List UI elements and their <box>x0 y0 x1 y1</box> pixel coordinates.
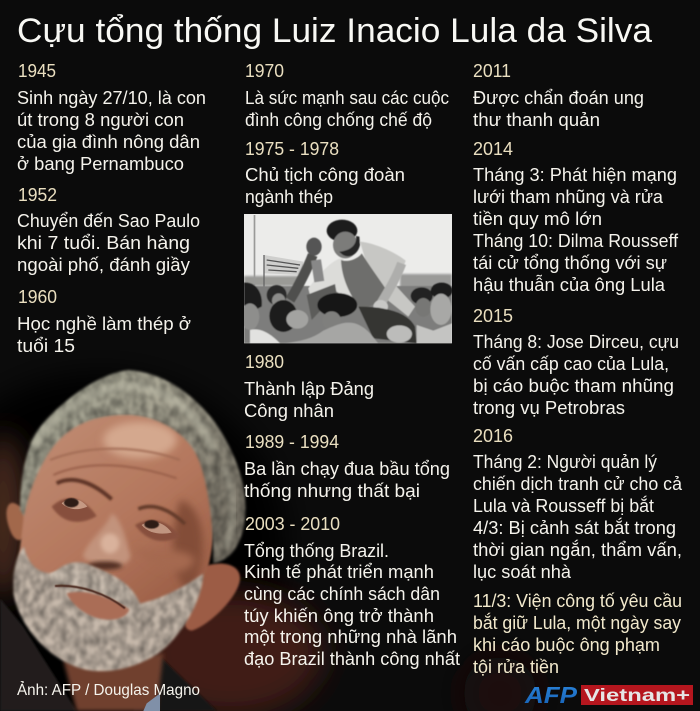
entry: 1945 <box>17 60 206 174</box>
logo: AFP Vietnam+: Vietnam+ <box>584 685 690 705</box>
entry: 2003 - 2010: Tổng thống Brazil. <box>244 540 389 561</box>
entry: 1952: ngoài phố, đánh giầy <box>17 254 191 275</box>
title: Cựu tổng thống Luiz Inacio Lula da Silva <box>17 12 653 50</box>
entry: 2014: Tháng 3: Phát hiện mạng <box>473 164 677 185</box>
entry: 2011 <box>473 60 644 130</box>
entry: 1945: út trong 8 người con <box>17 109 184 130</box>
entry: 1980: 1980 <box>245 351 284 372</box>
entry: 2016: tội rửa tiền <box>473 656 559 677</box>
entry: 2003 - 2010: túy khiến ông trở thành <box>244 605 434 626</box>
entry: 2015 <box>473 305 679 418</box>
entry: 2016: lục soát nhà <box>473 561 572 582</box>
entry: 2003 - 2010 <box>244 513 460 669</box>
entry: 1952: khi 7 tuổi. Bán hàng <box>17 232 190 253</box>
entry: 1975 - 1978 <box>245 138 405 207</box>
entry: 1980 <box>244 351 374 421</box>
entry: 1975 - 1978: Chủ tịch công đoàn <box>245 164 405 185</box>
entry: 2015: bị cáo buộc tham nhũng <box>473 375 674 396</box>
entry: 2014: tái cử tổng thống với sự <box>473 252 667 273</box>
entry: 2016: Lula và Rousseff bị bắt <box>473 495 654 516</box>
entry: 1952: Chuyển đến Sao Paulo <box>17 210 200 231</box>
entry: 1989 - 1994: 1989 - 1994 <box>245 431 339 452</box>
entry: 2003 - 2010: 2003 - 2010 <box>245 513 340 534</box>
entry: 1945: của gia đình nông dân <box>17 131 200 152</box>
entry: 1989 - 1994 <box>244 431 450 501</box>
entry: 2014: lưới tham nhũng và rửa <box>473 186 664 207</box>
entry: 2016: 4/3: Bị cảnh sát bắt trong <box>473 517 676 538</box>
entry: 1970: đình công chống chế độ <box>245 109 432 130</box>
entry: 1975 - 1978: ngành thép <box>245 186 333 207</box>
entry: 2015: Tháng 8: Jose Dirceu, cựu <box>473 331 679 352</box>
entry: 2016: thời gian ngắn, thẩm vấn, <box>473 539 682 560</box>
column 1 <box>17 60 206 356</box>
photo: Lula carried by crowd <box>241 214 453 343</box>
entry: 2016 <box>473 425 683 677</box>
caption: photo credit: Ảnh: AFP / Douglas Magno <box>17 680 200 699</box>
logo: AFP Vietnam+: AFP <box>524 682 578 708</box>
entry: 2014: 2014 <box>473 138 513 159</box>
entry: 2011: thư thanh quản <box>473 109 600 130</box>
entry: 1952 <box>17 184 200 275</box>
entry: 2015: cố vấn cấp cao của Lula, <box>473 353 669 374</box>
entry: 1960 <box>17 286 191 356</box>
entry: 2003 - 2010: một trong những nhà lãnh <box>244 626 457 647</box>
entry: 2016: 2016 <box>473 425 513 446</box>
entry: 1970: Là sức mạnh sau các cuộc <box>245 87 449 108</box>
entry: 2014 <box>473 138 679 295</box>
entry: 2003 - 2010: đạo Brazil thành công nhất <box>244 648 460 669</box>
entry: 1989 - 1994: Ba lần chạy đua bầu tổng <box>244 458 450 479</box>
entry: 2016: chiến dịch tranh cử cho cả <box>473 473 683 494</box>
entry: 2014: tiền quy mô lớn <box>473 208 602 229</box>
entry: 1945: ở bang Pernambuco <box>17 153 184 174</box>
column 2 <box>241 60 460 669</box>
entry: 2015: 2015 <box>473 305 513 326</box>
entry: 1970 <box>245 60 449 130</box>
entry: 1960: 1960 <box>18 286 57 307</box>
entry: 2016: 11/3: Viện công tố yêu cầu <box>473 590 682 611</box>
column 3 <box>473 60 683 677</box>
entry: 1960: tuổi 15 <box>17 335 75 356</box>
entry: 2016: bắt giữ Lula, một ngày say <box>473 612 682 633</box>
entry: 2016: Tháng 2: Người quản lý <box>473 451 658 472</box>
entry: 1980: Công nhân <box>244 400 334 421</box>
entry: 1970: 1970 <box>245 60 284 81</box>
entry: 1945: Sinh ngày 27/10, là con <box>17 87 206 108</box>
entry: 2014: Tháng 10: Dilma Rousseff <box>473 230 679 251</box>
entry: 2003 - 2010: cùng các chính sách dân <box>244 583 440 604</box>
entry: 2014: hậu thuẫn của ông Lula <box>473 274 666 295</box>
entry: 1989 - 1994: thống nhưng thất bại <box>244 480 420 501</box>
entry: 1980: Thành lập Đảng <box>244 378 374 399</box>
portrait photo: Lula <box>0 370 537 711</box>
entry: 1975 - 1978: 1975 - 1978 <box>245 138 339 159</box>
entry: 2015: trong vụ Petrobras <box>473 397 625 418</box>
entry: 2003 - 2010: Kinh tế phát triển mạnh <box>244 561 434 582</box>
entry: 2016: khi cáo buộc ông phạm <box>473 634 660 655</box>
logo: AFP Vietnam+ <box>524 682 693 708</box>
entry: 1960: Học nghề làm thép ở <box>17 313 191 334</box>
entry: 2011: 2011 <box>473 60 511 81</box>
entry: 1952: 1952 <box>18 184 57 205</box>
entry: 1945: 1945 <box>18 60 56 81</box>
entry: 2011: Được chẩn đoán ung <box>473 87 644 108</box>
